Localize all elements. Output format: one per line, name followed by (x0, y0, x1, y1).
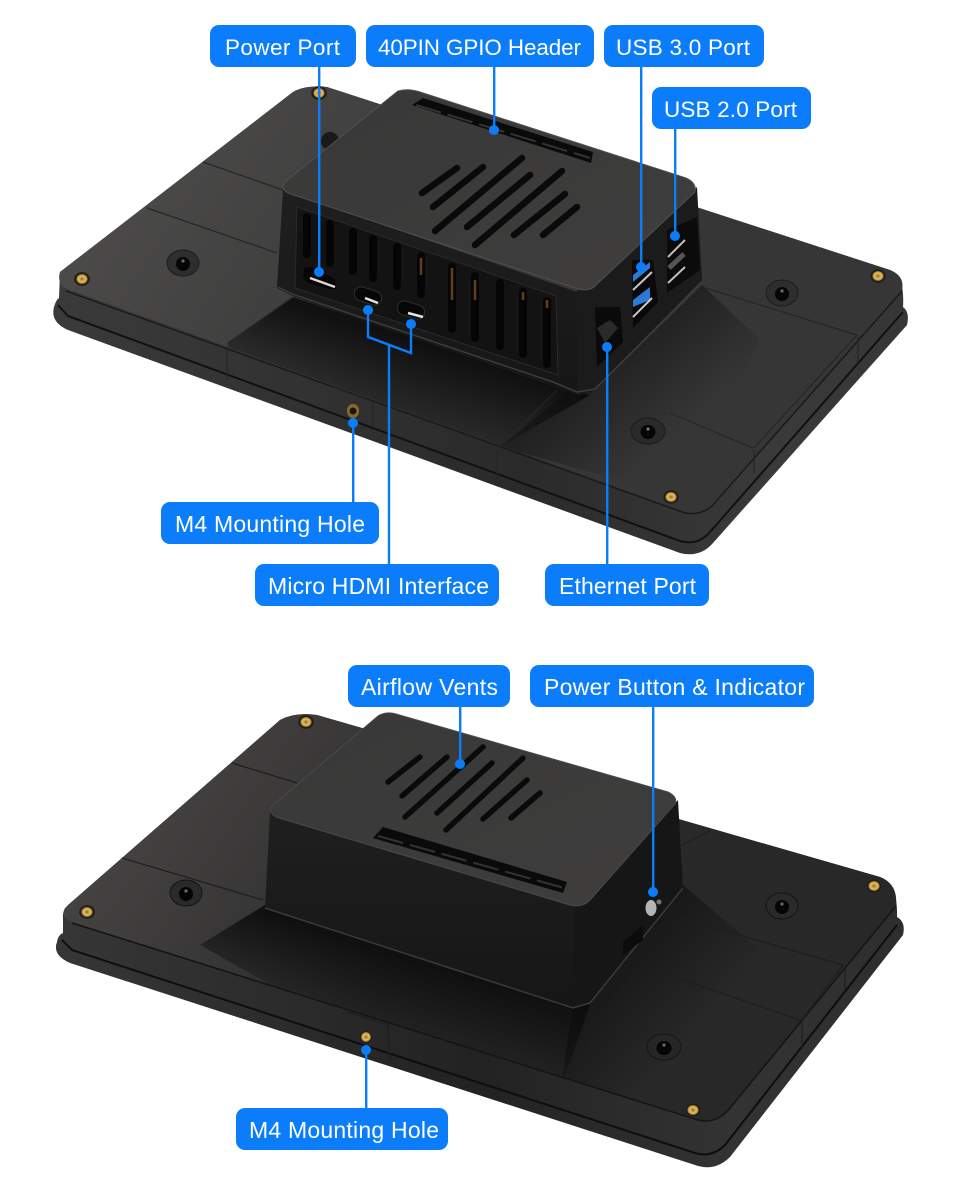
panel seams (122, 763, 845, 1060)
label: M4 Mounting Hole (top) (161, 502, 379, 544)
label: Power Port (210, 25, 356, 67)
connector: power button (648, 706, 658, 897)
connector: M4 hole top (348, 418, 358, 503)
power button and indicator (646, 900, 662, 916)
label: Power Button & Indicator (530, 665, 814, 707)
label: 40PIN GPIO Header: 40PIN GPIO Header (378, 35, 582, 60)
enclosure flange highlight (278, 282, 702, 392)
connector: power port (314, 66, 324, 277)
label: USB 3.0 Port: USB 3.0 Port (616, 35, 751, 60)
panel surface (59, 87, 903, 513)
device: bottom rear view (56, 713, 904, 1167)
brass inserts (79, 715, 882, 1117)
GPIO header slot (412, 98, 593, 163)
connector: Airflow vents (455, 706, 465, 769)
enclosure top face (271, 713, 676, 906)
label: USB 2.0 Port: USB 2.0 Port (664, 97, 798, 122)
connector: Ethernet (602, 342, 612, 565)
connector lines and dots (314, 66, 680, 1109)
enclosure top face (283, 90, 695, 290)
black screws (170, 880, 798, 1060)
GPIO header slot (373, 827, 567, 893)
power port (303, 267, 336, 289)
surface edge line (66, 291, 902, 514)
shadow in front of enclosure (228, 297, 590, 447)
warm glints inside vents (421, 258, 547, 308)
label: 40PIN GPIO Header (366, 25, 594, 67)
front recess (295, 207, 558, 375)
label: Micro HDMI Interface (255, 564, 499, 606)
USB 3.0 ports (632, 260, 658, 328)
label: M4 Mounting Hole (bottom) (236, 1108, 448, 1150)
label: Ethernet Port (545, 564, 709, 606)
panel body and rim (53, 87, 908, 554)
front vent slots (307, 217, 547, 364)
surface edge line (72, 906, 896, 1121)
top vent slots (422, 158, 577, 245)
connector: Micro HDMI (363, 305, 416, 565)
ethernet port (595, 307, 623, 367)
HDMI ports (353, 285, 426, 321)
panel surface (64, 714, 896, 1120)
label: Airflow Vents (348, 665, 510, 707)
connector: USB 3.0 (636, 66, 646, 272)
label: USB 3.0 Port (604, 25, 764, 67)
USB 2.0 ports (667, 217, 700, 293)
label: M4 Mounting Hole (top): M4 Mounting Hole (175, 511, 365, 537)
rim groove (62, 925, 897, 1154)
enclosure right face (577, 187, 702, 395)
shadow beside enclosure (502, 285, 744, 468)
connector: USB 2.0 (670, 128, 680, 241)
label: M4 Mounting Hole (bottom): M4 Mounting Hole (249, 1117, 439, 1143)
label: Power Button & Indicator: Power Button & Indicator (544, 674, 805, 700)
enclosure flange highlight (265, 888, 683, 1008)
label: Ethernet Port: Ethernet Port (559, 573, 697, 599)
shadow beside enclosure (562, 885, 724, 1082)
panel seams (147, 162, 858, 480)
enclosure front face (265, 812, 575, 1008)
rim groove (58, 305, 903, 542)
enclosure right face (572, 800, 683, 1008)
label: USB 2.0 Port (652, 87, 811, 129)
label: Micro HDMI Interface: Micro HDMI Interface (268, 573, 489, 599)
black screws (167, 132, 798, 444)
shadow in front of enclosure (200, 905, 590, 1072)
side slot (623, 925, 643, 955)
panel body and rim (56, 714, 904, 1167)
connector: M4 hole bottom (361, 1045, 371, 1109)
device: top rear view (53, 86, 908, 554)
label: Airflow Vents: Airflow Vents (361, 674, 498, 700)
enclosure front face (277, 190, 577, 395)
top vent slots (388, 747, 540, 830)
connector: GPIO header (489, 66, 499, 135)
brass inserts (74, 86, 886, 504)
label: Power Port: Power Port (225, 35, 341, 60)
